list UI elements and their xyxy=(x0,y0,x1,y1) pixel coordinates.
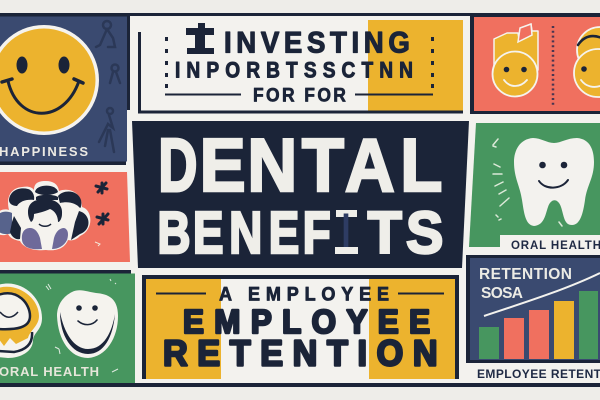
title: benefits: I xyxy=(342,203,350,259)
panel: people xyxy=(0,172,130,262)
panel: oral health right xyxy=(469,123,600,254)
title: benefits: TS xyxy=(368,201,443,266)
panel: retention chart xyxy=(466,255,600,381)
text: chart title: RETENTION xyxy=(479,266,572,283)
title: benefits: BENEF xyxy=(157,201,331,266)
icon: smiley face xyxy=(0,25,99,135)
icon: group of people xyxy=(0,181,90,250)
icon: smiling tooth xyxy=(57,290,118,358)
heading: employee: EMPLOYEE xyxy=(183,303,430,340)
icon: sparkles xyxy=(493,139,562,226)
icon: background figures xyxy=(96,21,120,152)
icon: dotted divider xyxy=(552,26,554,105)
icon: smiley with hair xyxy=(574,27,600,97)
icon: smiling molar xyxy=(514,138,594,226)
panel: dental benefits title xyxy=(132,121,469,268)
panel: smiley faces xyxy=(470,13,600,114)
icon: smiley with hat xyxy=(492,24,538,96)
panel: employee retention heading xyxy=(142,275,459,379)
title: benefits xyxy=(157,201,443,266)
text: employee retention caption: EMPLOYEE RETENT xyxy=(477,367,600,381)
bar chart xyxy=(479,291,598,359)
text: oral health label: ORAL HEALTH xyxy=(0,364,99,379)
title: dental: ENTAL xyxy=(200,124,442,208)
text: a employee: A EMPLOYEE xyxy=(219,283,389,305)
icon: yellow tooth xyxy=(0,283,42,358)
heading: investing: INVESTING xyxy=(224,26,410,60)
icon: header glyph xyxy=(186,23,214,54)
heading: happiness label: HAPPINESS xyxy=(0,144,88,159)
trend line xyxy=(484,273,600,316)
title: dental: D xyxy=(158,123,197,207)
text: chart subtitle: SOSA xyxy=(481,285,523,302)
panel: investing header xyxy=(138,20,463,114)
text: for for: FOR FOR xyxy=(253,84,346,106)
panel: happiness xyxy=(0,16,130,165)
text: garbled subheading: INPORBTSSCTNN xyxy=(175,58,413,83)
text: oral health label: ORAL HEALTH xyxy=(511,240,600,252)
panel: oral health left xyxy=(0,274,135,383)
icon: asterisks xyxy=(96,183,108,224)
heading: retention: RETENTION xyxy=(163,334,438,374)
